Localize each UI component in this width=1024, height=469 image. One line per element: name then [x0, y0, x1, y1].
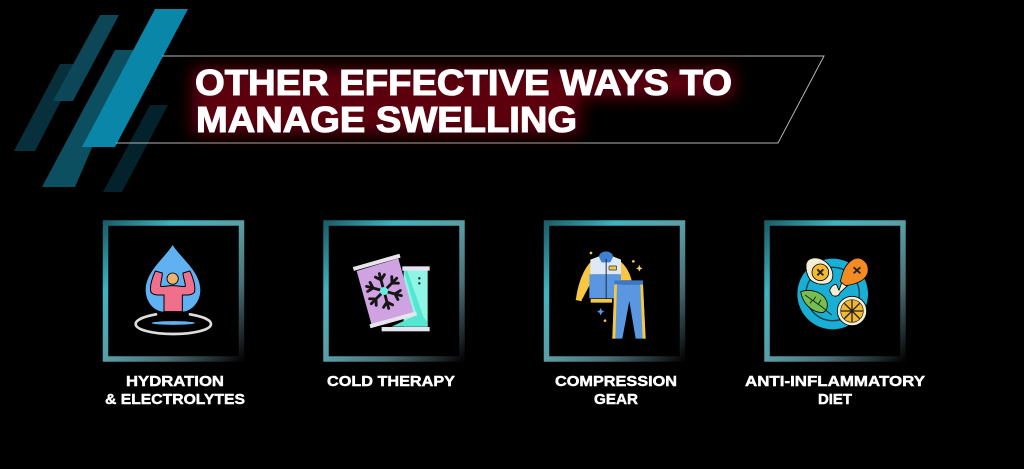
frame [326, 223, 462, 359]
title text: OTHER EFFECTIVE WAYS TO [195, 62, 732, 103]
label: DIET [818, 391, 852, 408]
frame [546, 223, 682, 359]
title text [195, 62, 732, 140]
label: COMPRESSION [555, 373, 677, 390]
banner outline [116, 56, 824, 143]
leaf [801, 290, 827, 313]
decorative slanted bars [14, 9, 188, 192]
snowflake [362, 269, 406, 313]
icon: plate of food [797, 258, 868, 329]
card: hydration [105, 223, 245, 408]
citrus [837, 296, 867, 326]
label [105, 373, 245, 408]
label [745, 373, 925, 408]
card: cold therapy [326, 223, 462, 390]
label: HYDRATION [126, 373, 224, 390]
icon: jacket and leggings [576, 251, 646, 339]
egg [806, 258, 833, 284]
title banner [116, 56, 824, 143]
frame [106, 223, 242, 359]
chicken [830, 279, 848, 296]
label: ANTI-INFLAMMATORY [745, 373, 925, 390]
card: anti-inflammatory diet [745, 223, 925, 408]
card: compression gear [546, 223, 682, 408]
icon: water drop with person [136, 245, 211, 334]
label: GEAR [594, 391, 638, 408]
title red glow [192, 68, 734, 134]
frame [767, 223, 903, 359]
label: COLD THERAPY [327, 373, 455, 390]
label: & ELECTROLYTES [105, 391, 245, 408]
title text: MANAGE SWELLING [196, 99, 577, 140]
label [555, 373, 677, 408]
icon: cold packs [353, 256, 430, 331]
